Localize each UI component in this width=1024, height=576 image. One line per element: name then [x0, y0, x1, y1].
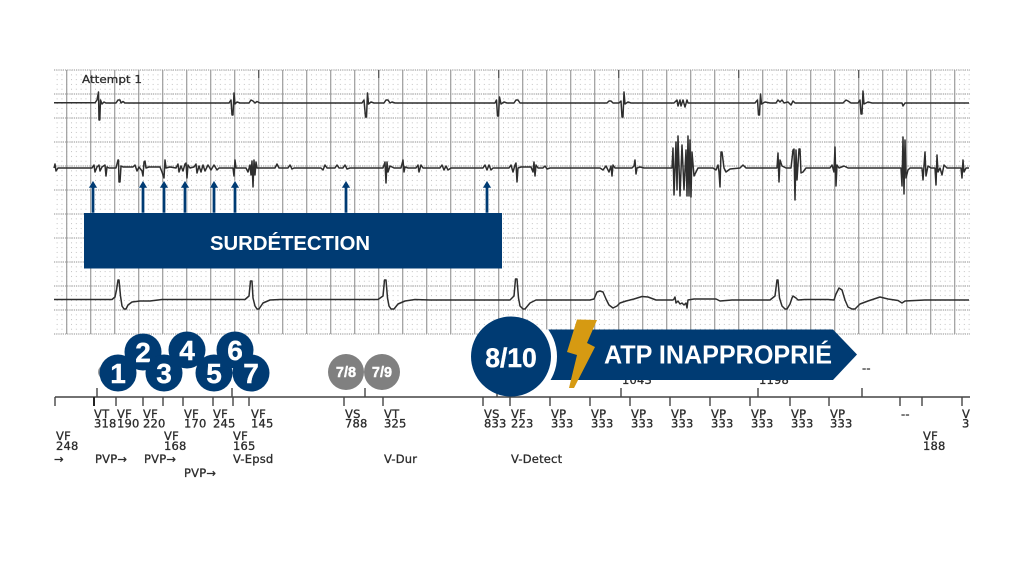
- banner: SURDÉTECTION: [84, 213, 502, 268]
- timeline labels: second row: [56, 429, 946, 453]
- event 4: [168, 332, 206, 368]
- timeline labels: first row: VF: [184, 407, 199, 421]
- banner arrow: ATP INAPPROPRIÉ: [540, 330, 857, 380]
- oversensing arrows: [88, 180, 492, 213]
- timeline labels: first row: VP: [551, 407, 566, 421]
- banner arrow: ATP INAPPROPRIÉ: ATP INAPPROPRIÉ: [604, 340, 832, 370]
- gray counter 7/8: 7/8: [336, 365, 356, 381]
- timeline labels: markers: V-Detect: [511, 452, 563, 466]
- small gray marker behind circle 1: [98, 365, 112, 379]
- event 4: 4: [179, 335, 195, 366]
- timeline labels: first row: VF: [511, 407, 526, 421]
- timeline labels: first row: VP: [791, 407, 806, 421]
- event 1: 1: [110, 358, 126, 389]
- timeline axis and ticks: [55, 388, 970, 406]
- banner: SURDÉTECTION: SURDÉTECTION: [210, 232, 370, 255]
- timeline labels: first row: VS: [484, 407, 500, 421]
- label: Attempt 1: Attempt 1: [82, 73, 142, 86]
- timeline labels: first row: 325: [384, 416, 407, 430]
- event 2: [124, 334, 162, 370]
- timeline labels: markers: [54, 452, 563, 480]
- trace: bottom channel: [54, 279, 969, 309]
- timeline labels: first row: 333: [830, 416, 853, 430]
- infographic: ECG tracing with oversensing annotations: [53, 70, 970, 478]
- timeline labels: second row: VF: [923, 429, 938, 443]
- hidden interval labels behind banner: 1043: [622, 373, 652, 387]
- timeline labels: markers: PVP→: [144, 452, 176, 466]
- timeline labels: first row: VP: [671, 407, 686, 421]
- event 7: [232, 354, 270, 392]
- counter 8/10: 8/10: [485, 343, 537, 373]
- timeline labels: first row: 223: [511, 416, 534, 430]
- timeline labels: first row: --: [901, 407, 910, 421]
- ECG traces: [54, 91, 969, 309]
- event 5: 5: [206, 358, 222, 389]
- timeline labels: first row: VF: [143, 407, 158, 421]
- timeline labels: first row: VP: [830, 407, 845, 421]
- timeline labels: first row: 788: [345, 416, 368, 430]
- event 3: 3: [156, 358, 172, 389]
- timeline labels: first row: VS: [345, 407, 361, 421]
- timeline labels: first row: 333: [711, 416, 734, 430]
- timeline labels: first row: VP: [631, 407, 646, 421]
- timeline labels: second row: 165: [233, 439, 256, 453]
- gray counter 7/8: [328, 354, 364, 390]
- timeline labels: first row: VT: [384, 407, 399, 421]
- timeline labels: second row: 188: [923, 439, 946, 453]
- counter 8/10: [471, 316, 557, 396]
- timeline labels: markers: →: [54, 452, 64, 466]
- timeline labels: first row: V: [962, 407, 970, 421]
- timeline labels: first row: 318: [94, 416, 117, 430]
- event 7: 7: [243, 358, 259, 389]
- timeline labels: first row: 333: [551, 416, 574, 430]
- timeline labels: first row: 190: [117, 416, 140, 430]
- gray counter 7/9: [364, 354, 400, 390]
- timeline labels: first row: 333: [791, 416, 814, 430]
- timeline labels: second row: 248: [56, 439, 79, 453]
- timeline labels: first row: VF: [251, 407, 266, 421]
- numbered oversensing events 1 to 7: [100, 332, 270, 392]
- timeline labels: markers: V-Epsd: [233, 452, 273, 466]
- timeline labels: first row: VT: [94, 407, 109, 421]
- event 5: [196, 354, 232, 392]
- event 2: 2: [135, 337, 151, 368]
- event 1: [100, 354, 136, 392]
- timeline labels: markers: PVP→: [184, 466, 216, 480]
- timeline labels: first row: 333: [591, 416, 614, 430]
- timeline labels: first row: VP: [591, 407, 606, 421]
- timeline labels: first row: 333: [671, 416, 694, 430]
- timeline labels: second row: VF: [233, 429, 248, 443]
- timeline labels: first row: 170: [184, 416, 207, 430]
- timeline labels: first row: VP: [751, 407, 766, 421]
- timeline labels: first row: 145: [251, 416, 274, 430]
- timeline labels: first row: VF: [117, 407, 132, 421]
- timeline labels: second row: 168: [164, 439, 187, 453]
- event 6: 6: [227, 335, 243, 366]
- timeline labels: markers: PVP→: [95, 452, 127, 466]
- icon: lightning bolt: [567, 320, 597, 388]
- timeline labels: first row: [94, 407, 970, 430]
- ECG grid: [54, 70, 970, 334]
- timeline labels: first row: 833: [484, 416, 507, 430]
- timeline labels: markers: V-Dur: [384, 452, 417, 466]
- hidden interval labels behind banner: [622, 361, 871, 387]
- timeline labels: first row: 333: [631, 416, 654, 430]
- timeline labels: first row: VF: [213, 407, 228, 421]
- timeline labels: second row: VF: [56, 429, 71, 443]
- hidden interval labels behind banner: 1198: [759, 373, 789, 387]
- trace: top channel: [54, 91, 969, 120]
- hidden interval labels behind banner: --: [862, 361, 871, 375]
- timeline labels: first row: 245: [213, 416, 236, 430]
- timeline labels: first row: 220: [143, 416, 166, 430]
- gray counter 7/9: 7/9: [372, 365, 392, 381]
- event 3: [146, 354, 182, 392]
- trace: middle channel: [54, 136, 969, 200]
- timeline labels: first row: VP: [711, 407, 726, 421]
- timeline labels: first row: 3: [962, 416, 970, 430]
- timeline labels: first row: 333: [751, 416, 774, 430]
- timeline labels: second row: VF: [164, 429, 179, 443]
- event 6: [216, 332, 254, 368]
